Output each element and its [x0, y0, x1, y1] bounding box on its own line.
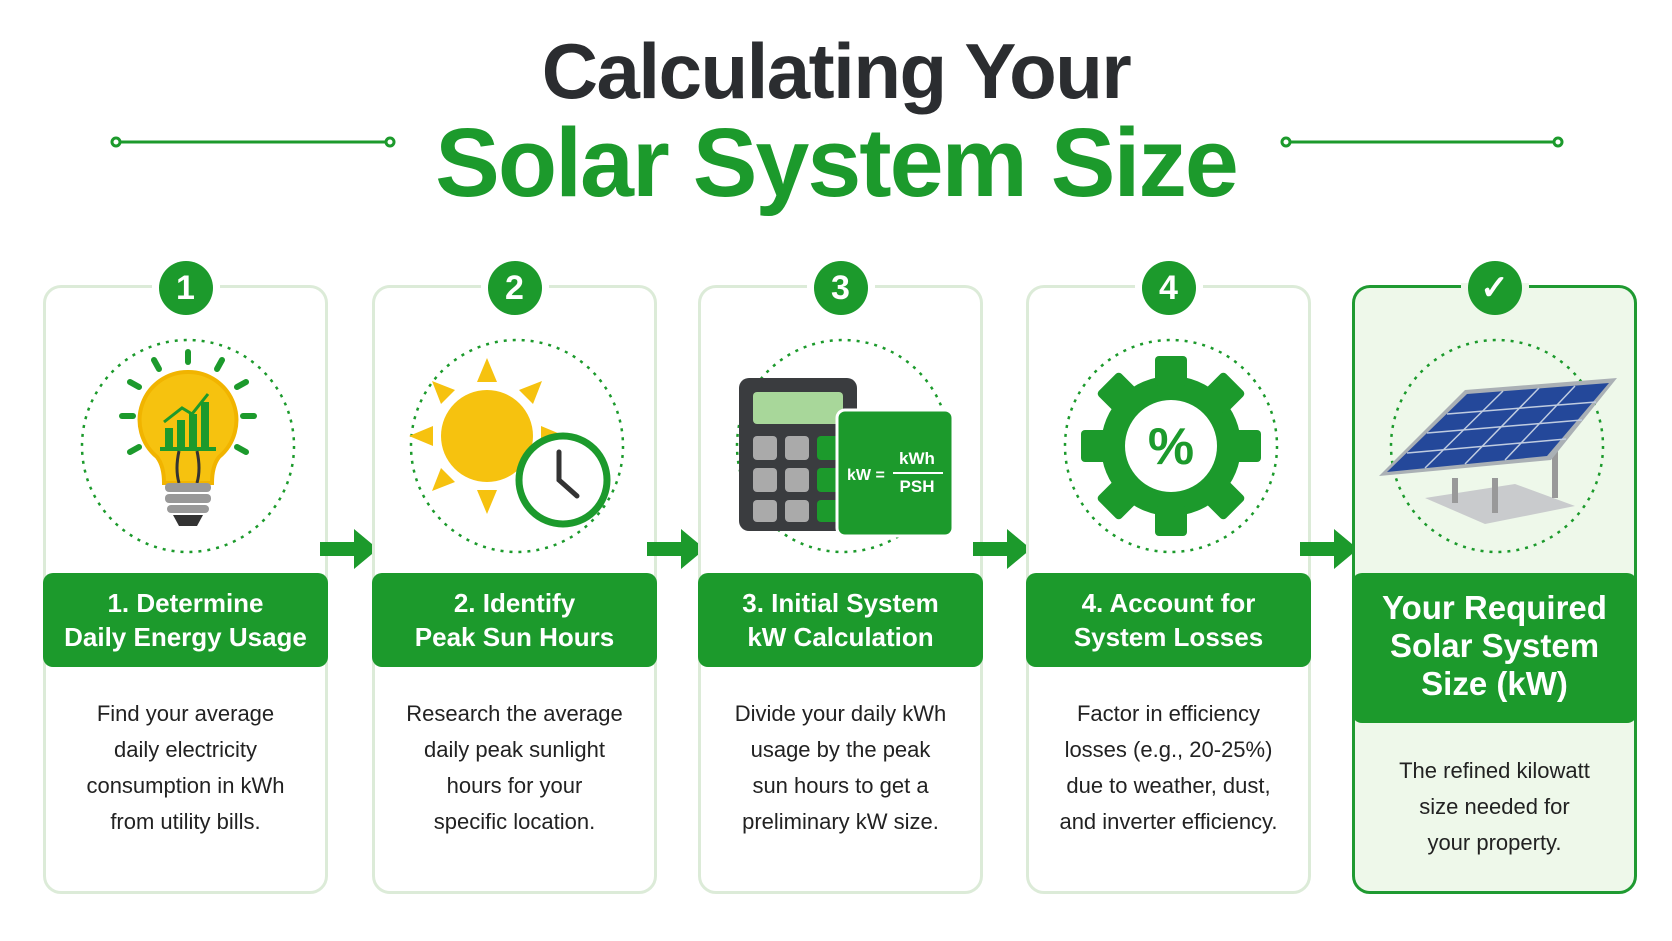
badge check: ✓ [1480, 269, 1509, 307]
text: losses (e.g., 20-25%) [1065, 737, 1272, 762]
title: Calculating Your [542, 27, 1130, 115]
arrow 1 [320, 529, 372, 569]
text: daily electricity [114, 737, 257, 762]
text: specific location. [434, 809, 595, 834]
icon: calculator with formula [736, 338, 952, 554]
arrow 4 [1300, 529, 1352, 569]
header: 2. Identify [454, 588, 575, 618]
header: kW Calculation [747, 622, 934, 652]
icon: calculator with formula: kWh [899, 449, 935, 468]
arrow 3 [973, 529, 1026, 569]
text: usage by the peak [751, 737, 930, 762]
decorative lines [110, 136, 1564, 148]
text: hours for your [447, 773, 582, 798]
header: 3. Initial System [742, 588, 939, 618]
icon: calculator with formula: PSH [900, 477, 934, 496]
header: 4. Account for [1082, 588, 1255, 618]
header: System Losses [1074, 622, 1263, 652]
header [372, 573, 657, 667]
panel: step 1 [43, 285, 328, 894]
text: your property. [1427, 830, 1562, 855]
panel: step 4 [1026, 285, 1311, 894]
text: Research the average [406, 701, 623, 726]
text: and inverter efficiency. [1059, 809, 1278, 834]
panel: result [1352, 285, 1637, 894]
header: Size (kW) [1421, 665, 1568, 702]
text: consumption in kWh [86, 773, 285, 798]
badge 1 [152, 259, 220, 317]
badge check [1460, 259, 1528, 317]
text: Divide your daily kWh [735, 701, 946, 726]
text [86, 701, 285, 834]
icon: gear with percent [1064, 338, 1278, 554]
panel: step 3 [698, 285, 983, 894]
icon: solar panel [1379, 338, 1617, 554]
badge 3: 3 [831, 269, 850, 307]
text: preliminary kW size. [742, 809, 939, 834]
header [698, 573, 983, 667]
header [43, 573, 328, 667]
header: Solar System [1390, 627, 1599, 664]
header: Daily Energy Usage [64, 622, 307, 652]
badge 3 [806, 259, 874, 317]
icon: calculator with formula: kW = [847, 467, 885, 484]
icon: gear with percent: % [1148, 418, 1194, 476]
badge 4 [1134, 259, 1202, 317]
header [1352, 573, 1637, 723]
subtitle: Solar System Size [435, 108, 1237, 217]
panel: step 2 [372, 285, 657, 894]
text: size needed for [1419, 794, 1570, 819]
text: due to weather, dust, [1066, 773, 1271, 798]
text: sun hours to get a [752, 773, 929, 798]
text: from utility bills. [110, 809, 261, 834]
header [1026, 573, 1311, 667]
text: Factor in efficiency [1077, 701, 1260, 726]
header: 1. Determine [107, 588, 264, 618]
text: The refined kilowatt [1399, 758, 1590, 783]
text [1059, 701, 1278, 834]
badge 1: 1 [176, 269, 195, 307]
text [406, 701, 623, 834]
text [1399, 758, 1590, 855]
badge 2: 2 [505, 269, 524, 307]
text: Find your average [97, 701, 274, 726]
badge 4: 4 [1159, 269, 1178, 307]
icon: light bulb [80, 338, 296, 554]
header: Peak Sun Hours [415, 622, 614, 652]
text: daily peak sunlight [424, 737, 605, 762]
header: Your Required [1382, 589, 1607, 626]
icon: sun and clock [409, 338, 624, 554]
text [735, 701, 946, 834]
arrow 2 [647, 529, 698, 569]
badge 2 [480, 259, 548, 317]
